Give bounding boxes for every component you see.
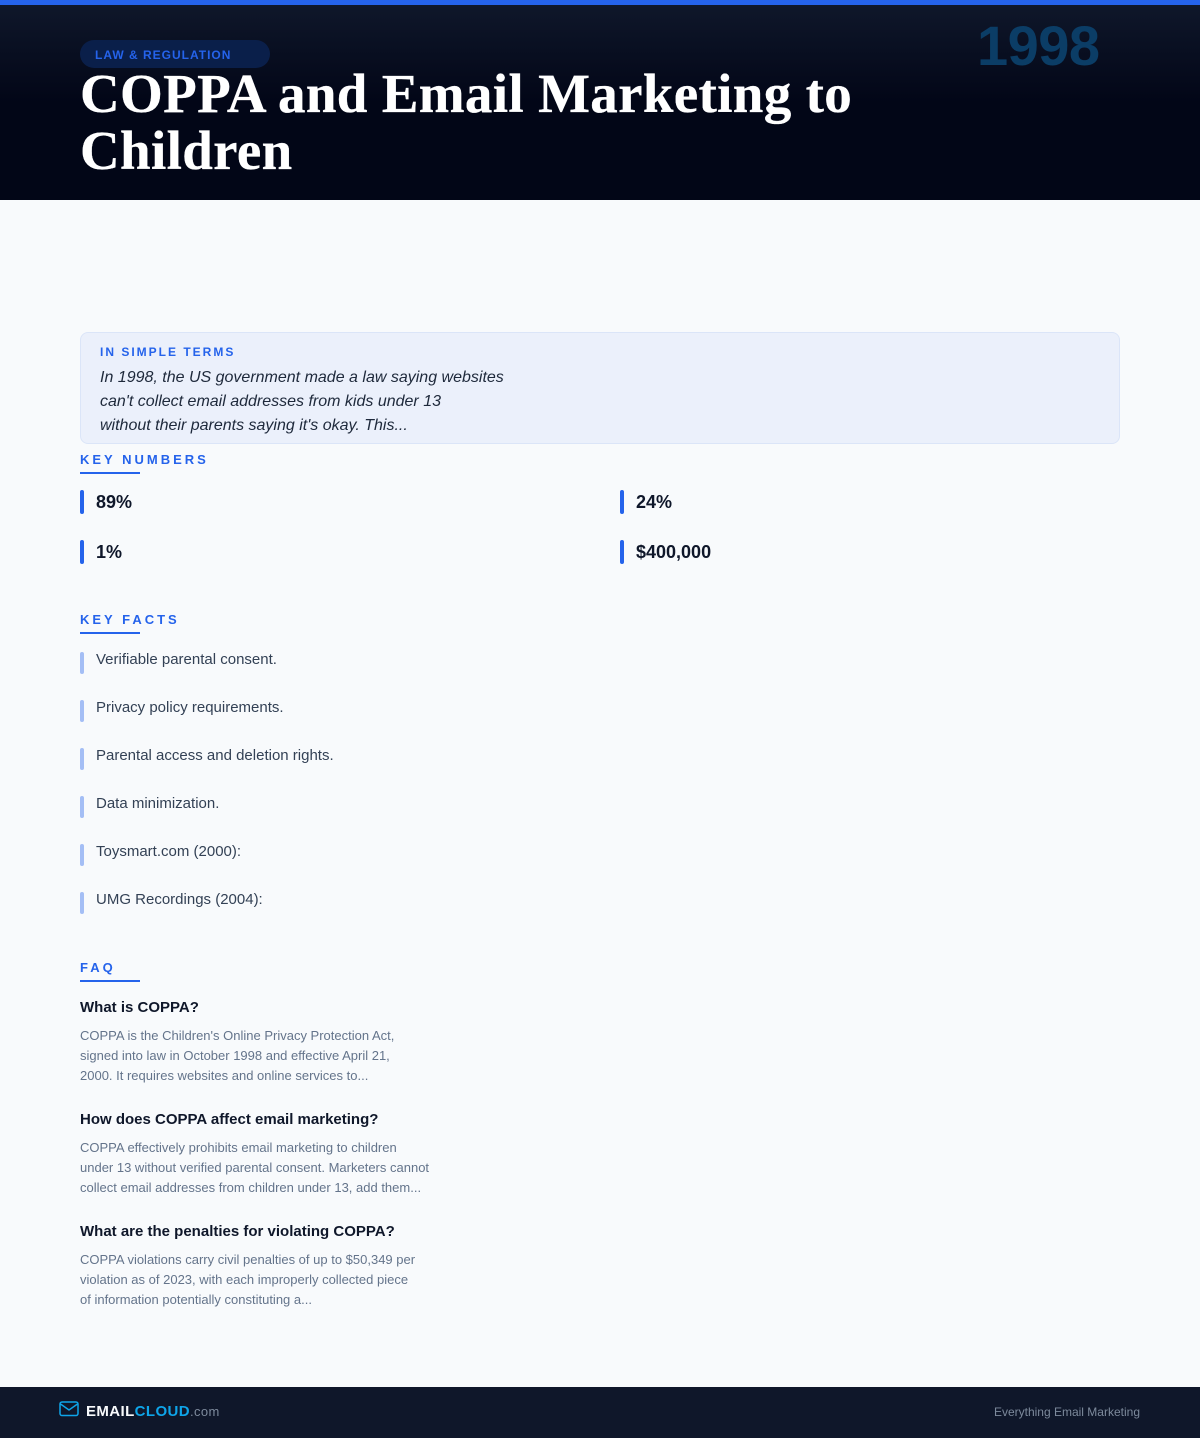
fact 5 [80,843,241,866]
callout text: can't collect email addresses from kids under 13 [100,393,441,410]
category pill [80,40,270,68]
faq 3 [80,1223,415,1307]
faq 2 [80,1111,429,1195]
stat: 1% [80,540,122,564]
answer: under 13 without verified parental consent. Marketers cannot [80,1160,429,1175]
heading: key facts: KEY FACTS [80,612,180,627]
logo wordmark: EMAILCLOUD.com [86,1403,220,1420]
answer: COPPA violations carry civil penalties of up to $50,349 per [80,1252,415,1267]
answer [80,1140,429,1195]
fact 6: UMG Recordings (2004): [96,891,263,908]
title: COPPA and Email Marketing to [80,63,852,124]
answer: 2000. It requires websites and online services to... [80,1068,368,1083]
answer: violation as of 2023, with each improperly collected piece [80,1272,408,1287]
fact 5: Toysmart.com (2000): [96,843,241,860]
answer [80,1028,394,1083]
callout label: IN SIMPLE TERMS [100,345,235,359]
fact 2: Privacy policy requirements. [96,699,284,716]
panel: in simple terms [80,332,1120,444]
callout text [100,369,504,434]
stat: 89% [80,490,132,514]
footer [0,1387,1200,1438]
question: What is COPPA? [80,999,199,1016]
heading: key numbers: KEY NUMBERS [80,452,209,467]
fact 1 [80,651,277,674]
answer: COPPA is the Children's Online Privacy Protection Act, [80,1028,394,1043]
heading: faq: FAQ [80,960,116,975]
fact 2 [80,699,284,722]
faq 1 [80,999,394,1083]
year watermark: 1998 [977,14,1100,77]
stat: 24%: 24% [636,492,672,512]
stat: 24% [620,490,672,514]
fact 1: Verifiable parental consent. [96,651,277,668]
fact 4 [80,795,219,818]
stat: $400,000 [620,540,711,564]
callout text: without their parents saying it's okay. This... [100,417,408,434]
fact 3 [80,747,334,770]
title: Children [80,120,293,181]
answer: collect email addresses from children under 13, add them... [80,1180,421,1195]
answer: signed into law in October 1998 and effective April 21, [80,1048,390,1063]
answer: COPPA effectively prohibits email marketing to children [80,1140,397,1155]
answer: of information potentially constituting a... [80,1292,312,1307]
question: How does COPPA affect email marketing? [80,1111,378,1128]
stat: 1%: 1% [96,542,122,562]
tagline: Everything Email Marketing [994,1405,1140,1419]
stat: 89%: 89% [96,492,132,512]
header band [0,0,1200,200]
question: What are the penalties for violating COPPA? [80,1223,395,1240]
stat: $400,000: $400,000 [636,542,711,562]
fact 3: Parental access and deletion rights. [96,747,334,764]
callout text: In 1998, the US government made a law saying websites [100,369,504,386]
fact 4: Data minimization. [96,795,219,812]
title [80,63,852,181]
icon: envelope [59,1401,79,1416]
category pill: LAW & REGULATION [95,48,231,62]
fact 6 [80,891,263,914]
answer [80,1252,415,1307]
